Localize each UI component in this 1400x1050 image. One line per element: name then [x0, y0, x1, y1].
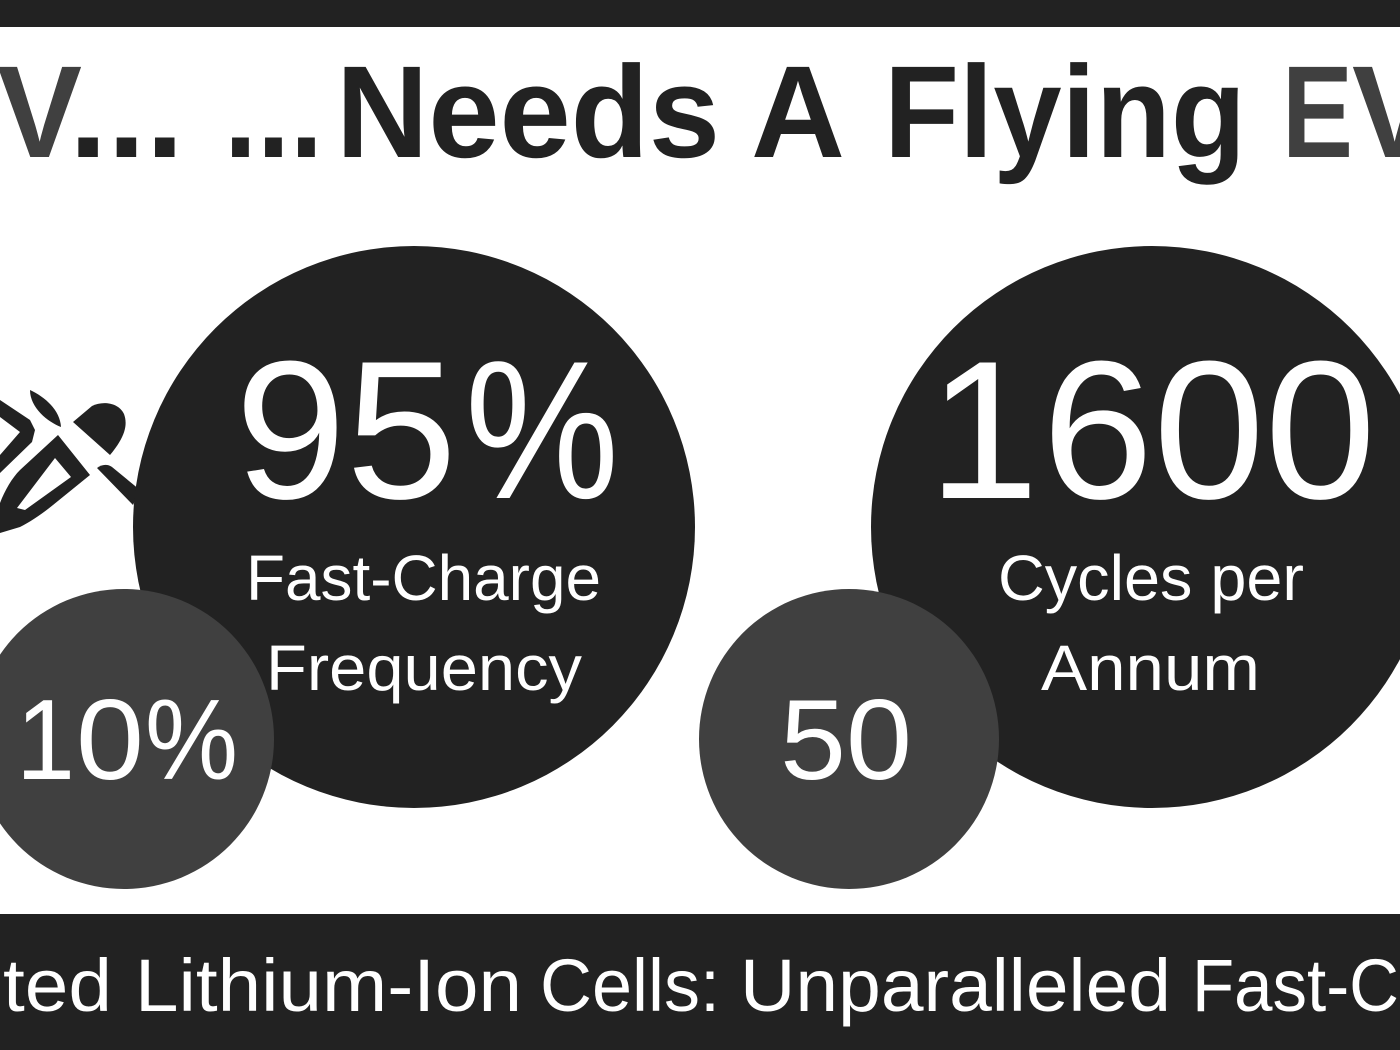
- top bar: [0, 0, 1400, 27]
- stat circle: fast-charge frequency: [133, 246, 695, 808]
- stat circle: fast-charge frequency: 95: [235, 320, 457, 540]
- title: Flying: [884, 38, 1246, 185]
- icon: flying vehicle logo: [0, 390, 140, 533]
- title: E: [1282, 38, 1353, 185]
- bottom banner: Unparalleled: [740, 944, 1171, 1027]
- stat circle: fast-charge frequency: Frequency: [266, 632, 582, 704]
- title: Needs: [336, 38, 720, 185]
- title: ...: [224, 38, 323, 185]
- comparison circle: 50: [699, 589, 999, 889]
- stat circle: cycles per annum: 600: [1042, 320, 1376, 540]
- title: [0, 38, 1400, 185]
- comparison circle: 10%: [0, 589, 274, 889]
- comparison circle: 10%: %: [145, 677, 238, 804]
- comparison circle: 50: 50: [780, 677, 912, 804]
- title: A: [751, 38, 845, 185]
- title: ...: [69, 38, 184, 185]
- bottom banner: ted: [3, 944, 112, 1027]
- comparison circle: 10%: 1: [16, 677, 75, 804]
- comparison circle: 10%: 0: [76, 677, 144, 804]
- bottom banner: Lithium-Ion: [135, 944, 522, 1027]
- stat circle: fast-charge frequency: %: [465, 320, 619, 540]
- bottom banner: [0, 914, 1400, 1050]
- stat circle: fast-charge frequency: Fast-Charge: [246, 542, 601, 614]
- stat circle: cycles per annum: Cycles per: [998, 542, 1304, 614]
- stat circle: cycles per annum: Annum: [1041, 632, 1260, 704]
- bottom banner: Cells:: [540, 944, 720, 1027]
- stat circle: cycles per annum: [871, 246, 1400, 808]
- stat circle: cycles per annum: 1: [928, 320, 1039, 540]
